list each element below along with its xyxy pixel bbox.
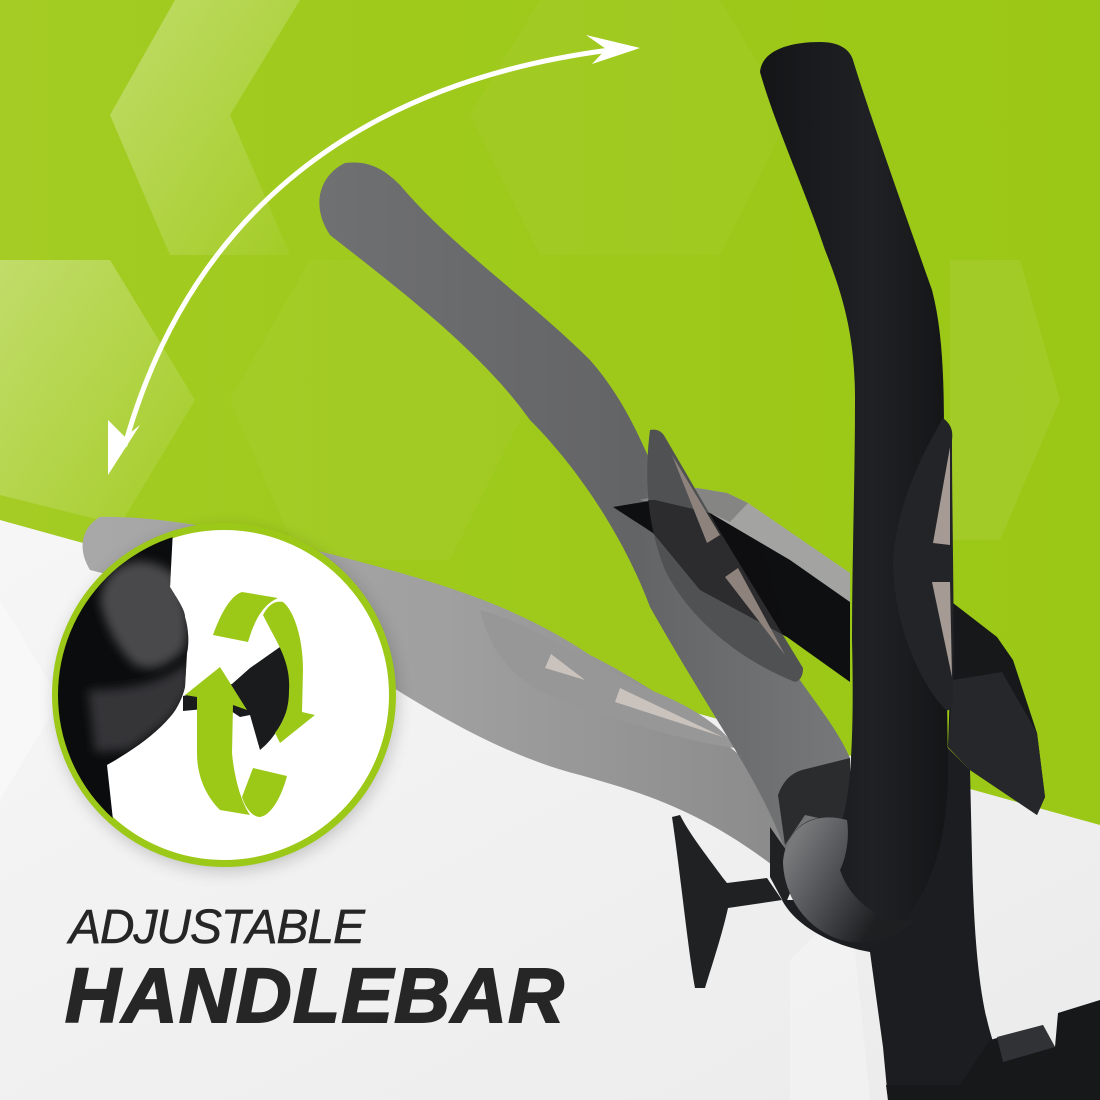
black frame in inset xyxy=(58,537,188,818)
base block and clamp xyxy=(886,1000,1100,1100)
knob on main post xyxy=(672,815,800,988)
hinge highlight xyxy=(783,817,915,943)
green arrow: left band xyxy=(185,667,250,815)
title: HANDLEBAR xyxy=(65,953,565,1039)
main black handlebar xyxy=(760,42,948,943)
green arrow: right band xyxy=(263,602,315,743)
title xyxy=(65,901,565,1039)
green arrow: bottom band xyxy=(242,768,287,817)
faded handlebar: lowest position xyxy=(83,517,800,865)
faded grip plate xyxy=(647,430,803,682)
handlebar grip plate xyxy=(893,418,954,710)
green background xyxy=(0,0,1100,830)
inset shadow xyxy=(56,530,396,870)
rotation direction arrow xyxy=(108,35,640,475)
knob in inset xyxy=(183,642,294,750)
lower post xyxy=(782,745,1010,1100)
inset circle: knob detail xyxy=(40,526,392,864)
title: ADJUSTABLE xyxy=(66,901,366,954)
white lower background xyxy=(0,520,1100,1100)
green arrow: top band xyxy=(213,592,278,642)
knuckle highlights xyxy=(88,561,190,752)
console display xyxy=(613,488,1045,815)
faded handlebar: middle position xyxy=(319,162,850,850)
